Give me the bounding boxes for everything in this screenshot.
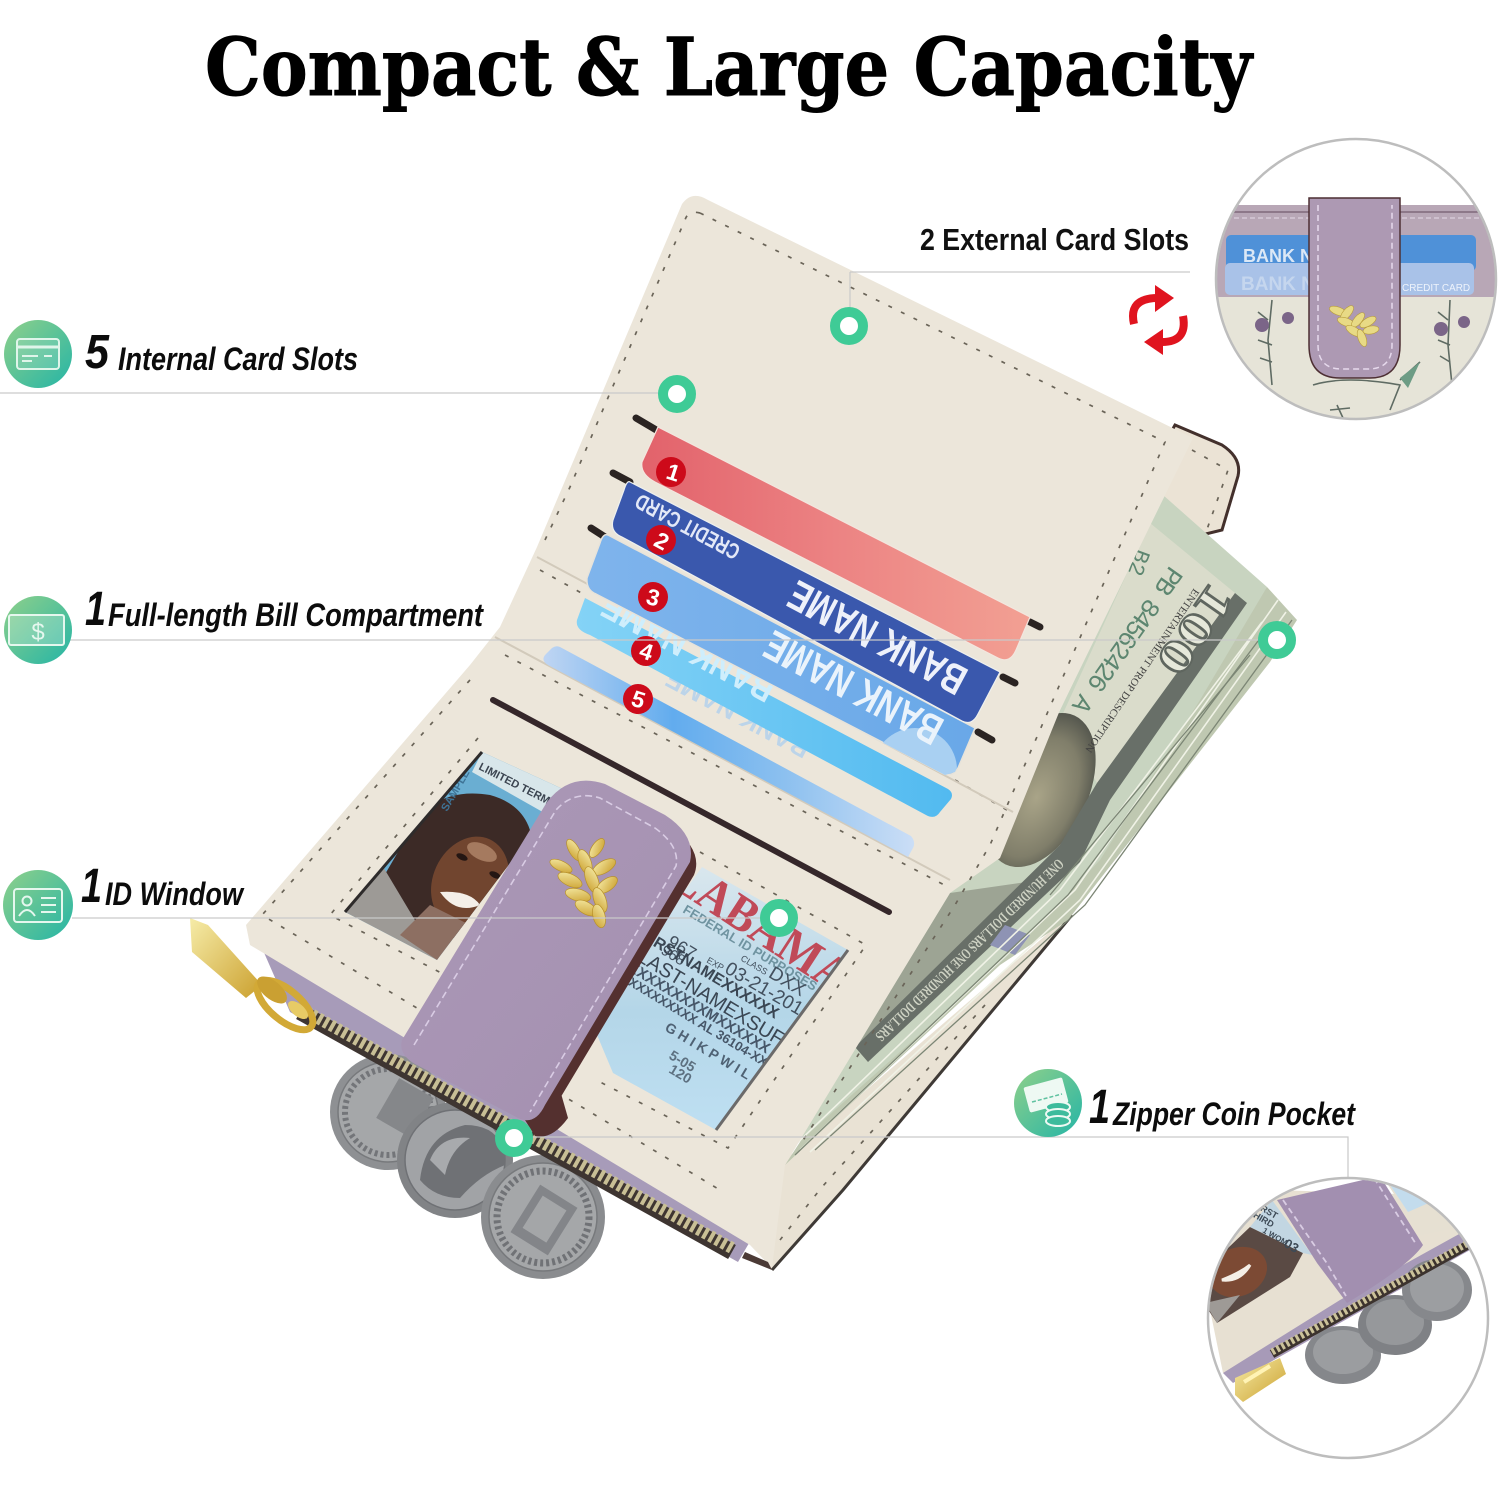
- inset zipper teeth: [1272, 1245, 1468, 1354]
- card number badges: 3: [644, 583, 663, 611]
- card number badges: 5: [628, 685, 649, 714]
- gold leaf ornament: [548, 836, 620, 929]
- banknote band text: ONE HUNDRED DOLLARS ONE HUNDRED DOLLARS: [872, 855, 1066, 1044]
- rear panel lower edge: [750, 910, 1075, 1270]
- zipper teeth: [300, 1008, 732, 1252]
- ID window: licence side: FIRSTNAMEXXXXXX: [638, 927, 782, 1023]
- inset: coin pocket detail: [1201, 1176, 1488, 1458]
- ID window: licence side: LAST-NAMEXSUFFIX: [633, 945, 814, 1066]
- banknotes: [785, 495, 1297, 1165]
- ID window: licence side: XXXXXXXXXMXXXXXX: [625, 959, 773, 1057]
- ID window: licence side: EXP 03-21-2019: [704, 948, 816, 1025]
- slot ends: [591, 418, 1040, 740]
- ID window: photo side: [345, 752, 562, 960]
- inset zipper pull: [1235, 1358, 1286, 1402]
- inset: external card slots detail: BANK N: [1241, 274, 1315, 295]
- card 2: [612, 482, 1000, 722]
- label: 1 zipper coin pocket: 1: [1089, 1081, 1110, 1134]
- inset: coin pocket detail: THIRD: [1247, 1207, 1276, 1230]
- stitching: [262, 212, 1228, 1190]
- icon: bill compartment: [4, 596, 72, 664]
- banknote caption: ENTERTAINMENT PROP DESCRIPTION: [1082, 586, 1201, 754]
- icon: zipper coin pocket: [1014, 1069, 1082, 1137]
- leader lines: [0, 272, 1348, 1178]
- ID window: licence side: XXXXXXXXXX AL 36104-XX: [618, 970, 771, 1069]
- ID window: licence side: [598, 867, 847, 1130]
- inset strap: [1309, 198, 1400, 378]
- title: Compact & Large Capacity: [205, 20, 1254, 114]
- inset coins: [1305, 1326, 1381, 1384]
- inset: external card slots detail: CREDIT CARD: [1402, 283, 1470, 294]
- card number badges: 4: [636, 637, 657, 666]
- card 5: BANK NAME: [661, 663, 815, 764]
- label: 1 ID window: 1: [81, 860, 102, 913]
- label: 2 external card slots: 2 External Card Slots: [920, 222, 1189, 257]
- inset card text: BANK N: [1243, 246, 1313, 266]
- wallet illustration: [190, 196, 1297, 1279]
- label: 1 zipper coin pocket: [1089, 1081, 1356, 1134]
- card number badges: 2: [650, 526, 674, 555]
- ID window: licence side: CLASS DXX: [737, 946, 809, 1001]
- pocket fold lines: [495, 557, 1013, 880]
- label: 1 ID window: [81, 860, 245, 913]
- label: 1 full-length bill compartment: Full-length Bill Compartment: [108, 597, 484, 633]
- ID window: licence side: 967: [664, 931, 700, 964]
- icon: internal card slots: [4, 320, 72, 388]
- icon: bill compartment: $: [31, 619, 45, 646]
- ID window: licence side: 968: [658, 942, 688, 969]
- main wallet body: [246, 196, 1193, 1268]
- banknote serial text: PB 84562426 A: [1065, 560, 1188, 719]
- inset: coin pocket detail: 03: [1282, 1236, 1302, 1256]
- inset floral print: [1258, 300, 1452, 418]
- ID window: licence side: 5-05: [666, 1047, 699, 1075]
- rear wallet panel: [1100, 425, 1239, 560]
- ID window: licence side: FEDERAL ID PURPOSES: [680, 902, 820, 994]
- icon: red flip arrows: [1133, 285, 1184, 355]
- label: 5 internal card slots: [85, 326, 358, 379]
- label: 1 zipper coin pocket: Zipper Coin Pocket: [1112, 1096, 1356, 1132]
- card 4: [577, 585, 952, 817]
- marker dots: [500, 312, 1291, 1152]
- label: 1 full-length bill compartment: [85, 583, 484, 636]
- label: 1 full-length bill compartment: 1: [85, 583, 106, 636]
- icon: ID window: [3, 870, 73, 940]
- coins: [330, 1054, 605, 1279]
- banknote denomination: 100: [1147, 575, 1245, 685]
- card 3: BANK NAME: [756, 621, 950, 754]
- ID window: licence side: G H I K P W I L: [662, 1019, 754, 1083]
- inset gold leaf: [1328, 304, 1380, 348]
- zipper fabric band: [262, 948, 752, 1262]
- portrait on banknote: [998, 713, 1096, 867]
- ID window: licence side: ALABAMA: [634, 829, 862, 1004]
- card 5: [543, 646, 914, 857]
- card 2: BANK NAME: [780, 571, 974, 704]
- card 4: BANK NAME: [595, 585, 782, 711]
- inset: coin pocket detail: 1 WOM: [1261, 1226, 1289, 1247]
- ID window frame stitching: [330, 738, 866, 1148]
- inset: external card slots detail: [1210, 139, 1498, 420]
- banknote series text: B2: [1121, 546, 1154, 579]
- ID window: photo side: SAMPLE: [439, 768, 473, 814]
- label: 5 internal card slots: Internal Card Slots: [118, 341, 358, 377]
- zipper pull: [190, 918, 321, 1038]
- label: 1 ID window: ID Window: [105, 876, 245, 912]
- slot: long upper window slit: [493, 700, 889, 912]
- closure strap: [401, 781, 696, 1137]
- card number badges: 1: [663, 458, 684, 487]
- ID window: licence side: 120: [666, 1061, 695, 1087]
- card 3: [586, 534, 975, 776]
- card 1: [642, 427, 1030, 660]
- ID window: photo side: LIMITED TERM: [477, 761, 552, 807]
- inset strap: [1277, 1176, 1423, 1303]
- inset ID text: FIRST: [1252, 1199, 1280, 1221]
- label: 5 internal card slots: 5: [85, 326, 110, 379]
- card number badges: [623, 457, 686, 714]
- card 2: CREDIT CARD: [631, 489, 744, 565]
